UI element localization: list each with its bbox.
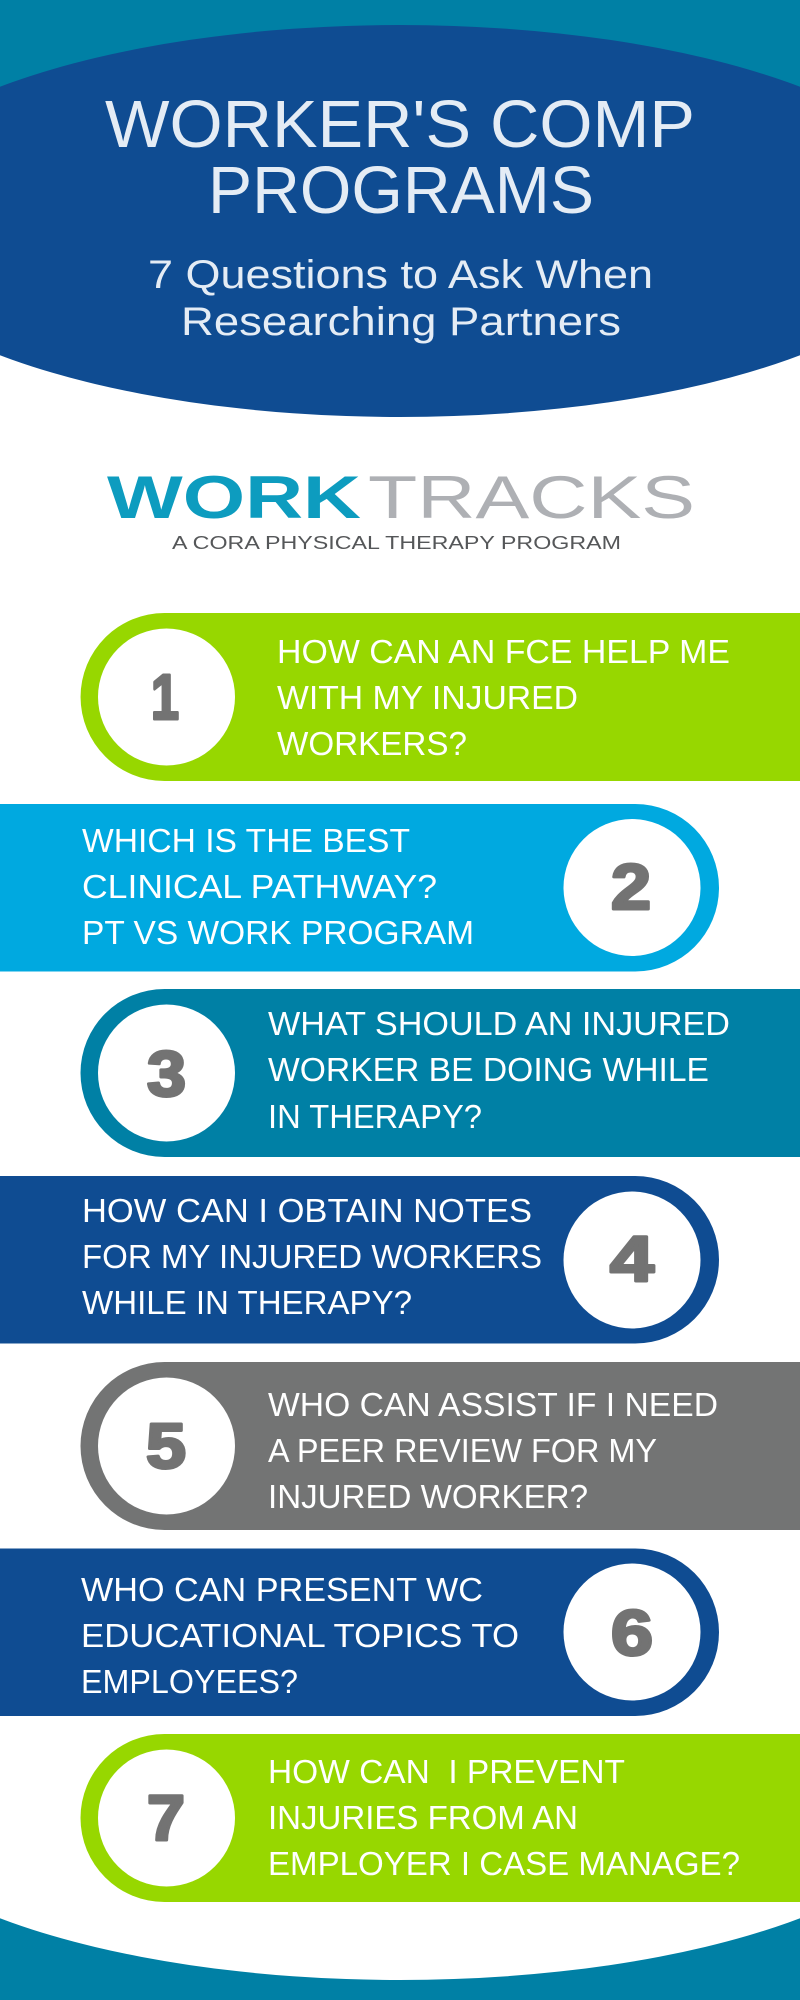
- logo: WorkTracks: [107, 464, 695, 553]
- question text: EMPLOYEES?: [81, 1663, 298, 1700]
- question 5 panel: [80, 1362, 800, 1530]
- question text: WHILE IN THERAPY?: [82, 1284, 412, 1321]
- footer background: teal band: [0, 1900, 800, 2000]
- number circle: [98, 1004, 235, 1142]
- question text: WHAT SHOULD AN INJURED: [268, 1005, 730, 1042]
- question text: [268, 1753, 740, 1882]
- question 3 panel: [80, 989, 800, 1157]
- question text: INJURED WORKER?: [268, 1478, 588, 1515]
- title: PROGRAMS: [208, 153, 594, 228]
- header panel: navy ellipse: [0, 25, 800, 417]
- band: [0, 1176, 719, 1344]
- question text: HOW CAN I OBTAIN NOTES: [82, 1192, 532, 1229]
- number circle: [564, 1192, 700, 1328]
- question text: [82, 822, 474, 951]
- subtitle: 7 Questions to Ask When: [148, 253, 653, 297]
- question 4 panel: [0, 1176, 719, 1344]
- question text: [268, 1386, 718, 1515]
- number: 3: [147, 1038, 186, 1110]
- band: [81, 613, 800, 781]
- question 7 panel: [80, 1734, 800, 1902]
- title: WORKER'S COMP: [105, 87, 695, 162]
- band: [80, 1734, 800, 1902]
- number circle: [98, 1378, 235, 1514]
- number: 6: [611, 1597, 653, 1669]
- question text: [81, 1571, 519, 1700]
- question 1 panel: [81, 613, 800, 781]
- question text: WHO CAN ASSIST IF I NEED: [268, 1386, 718, 1423]
- number: 5: [146, 1410, 186, 1482]
- subtitle: Researching Partners: [181, 300, 621, 344]
- question text: HOW CAN I PREVENT: [268, 1753, 625, 1790]
- band: [0, 804, 719, 972]
- title: [105, 87, 695, 228]
- logo tagline: A CORA PHYSICAL THERAPY PROGRAM: [172, 533, 621, 553]
- subtitle: [148, 253, 653, 344]
- header background: teal band: [0, 0, 800, 200]
- question text: FOR MY INJURED WORKERS: [82, 1238, 542, 1275]
- logo wordmark: WORK: WORK: [107, 464, 361, 531]
- question text: HOW CAN AN FCE HELP ME: [277, 633, 730, 670]
- logo wordmark: TRACKS: TRACKS: [368, 464, 695, 531]
- question text: WHO CAN PRESENT WC: [81, 1571, 483, 1608]
- number: 1: [151, 661, 179, 733]
- band: [0, 1548, 719, 1716]
- question text: [268, 1005, 730, 1135]
- number: 2: [611, 851, 651, 923]
- question text: INJURIES FROM AN: [268, 1799, 578, 1836]
- question text: WORKER BE DOING WHILE: [268, 1051, 709, 1088]
- number circle: [564, 1564, 700, 1700]
- number circle: [564, 819, 700, 956]
- question text: PT VS WORK PROGRAM: [82, 914, 474, 951]
- band: [80, 1362, 800, 1530]
- band: [80, 989, 800, 1157]
- number: 4: [610, 1223, 655, 1295]
- question text: EDUCATIONAL TOPICS TO: [81, 1617, 519, 1654]
- question 2 panel: [0, 804, 719, 972]
- number circle: [98, 1750, 235, 1886]
- question text: WHICH IS THE BEST: [82, 822, 410, 859]
- question text: CLINICAL PATHWAY?: [82, 868, 437, 905]
- footer white curve: [0, 1588, 800, 1980]
- number circle: [98, 628, 235, 766]
- question text: [277, 633, 730, 762]
- question text: WORKERS?: [277, 725, 467, 762]
- question text: WITH MY INJURED: [277, 679, 578, 716]
- question text: [82, 1192, 542, 1321]
- question text: A PEER REVIEW FOR MY: [268, 1432, 657, 1469]
- question text: IN THERAPY?: [268, 1098, 482, 1135]
- question 6 panel: [0, 1548, 719, 1716]
- question text: EMPLOYER I CASE MANAGE?: [268, 1845, 740, 1882]
- number: 7: [147, 1782, 185, 1854]
